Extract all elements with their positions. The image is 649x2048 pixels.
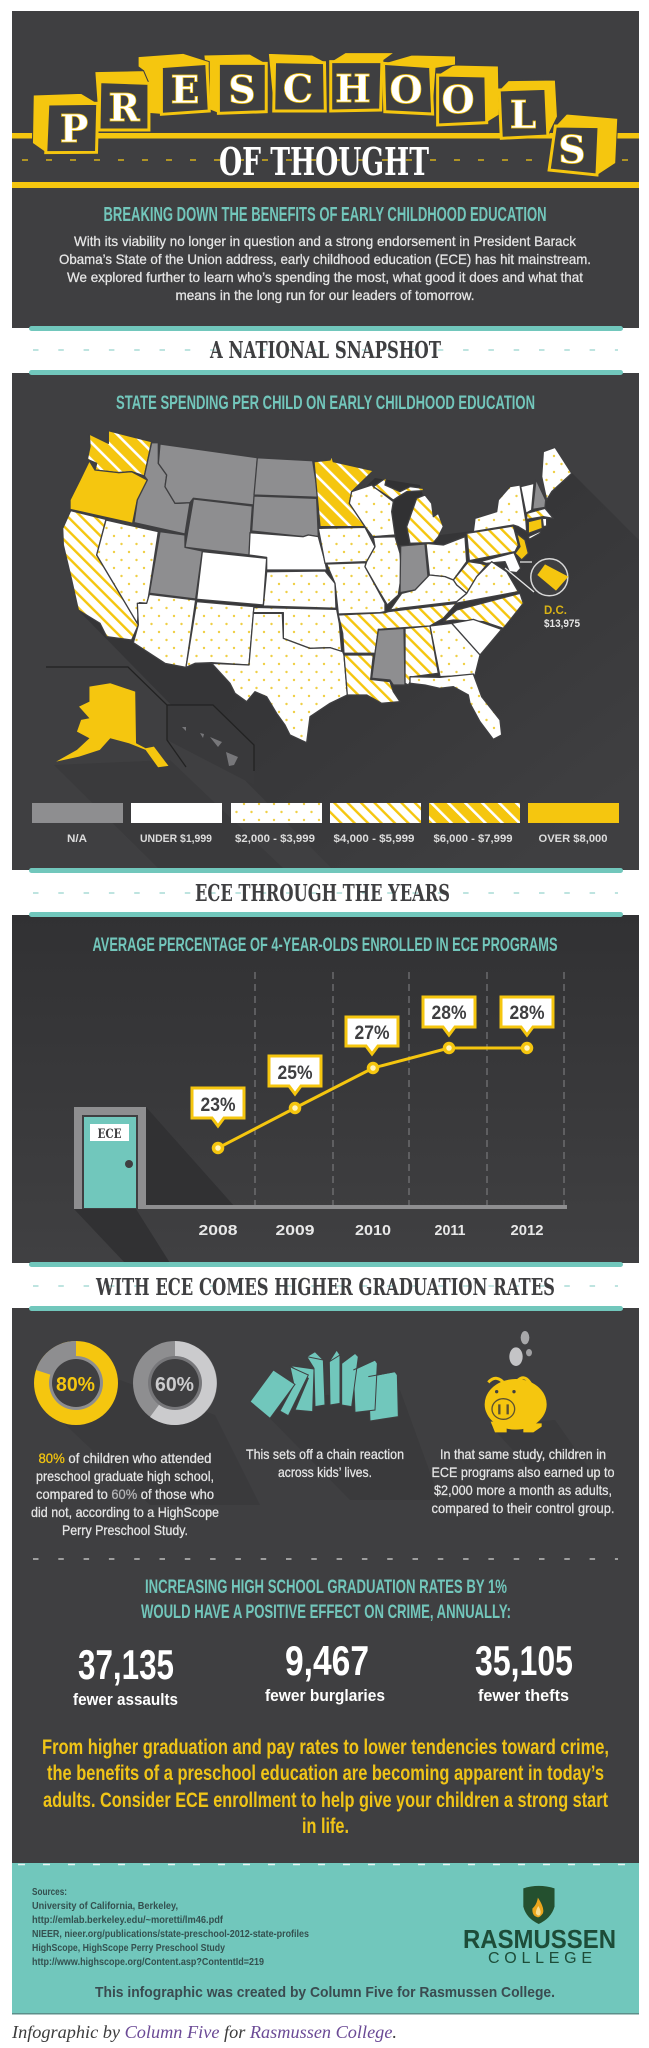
text: earnings stat: compared to their control group. bbox=[432, 1500, 614, 1516]
text: 80% stat: Perry Preschool Study. bbox=[62, 1522, 188, 1538]
credit line: This infographic was created by Column Five for Rasmussen College. bbox=[95, 1984, 555, 2001]
sources: University of California, Berkeley, bbox=[32, 1901, 178, 1912]
sources: http://emlab.berkeley.edu/~moretti/lm46.pdf bbox=[32, 1915, 224, 1926]
icon: door bbox=[74, 1107, 146, 1209]
icon: door: ECE bbox=[98, 1127, 122, 1142]
callout: D.C.: D.C. bbox=[544, 603, 567, 617]
icon shadows bbox=[50, 1380, 590, 1505]
callout: D.C. bbox=[505, 559, 580, 630]
stat: thefts: 35,105 bbox=[475, 1637, 573, 1684]
caption: Infographic by Column Five for Rasmussen College. bbox=[11, 2022, 397, 2042]
panel: header bbox=[12, 11, 639, 328]
intro text bbox=[59, 233, 591, 303]
donut: 60%: 60% bbox=[155, 1374, 194, 1396]
year labels: 2011 bbox=[434, 1223, 466, 1239]
data callouts: 25% bbox=[278, 1063, 313, 1084]
title blocks: PRESCHOOLS: O bbox=[389, 67, 423, 112]
panel: footer bbox=[12, 1863, 639, 2014]
section heading: a national snapshot: A NATIONAL SNAPSHOT bbox=[209, 337, 441, 364]
sources: HighScope, HighScope Perry Preschool Study bbox=[32, 1943, 225, 1954]
callout: D.C.: $13,975 bbox=[544, 618, 580, 630]
legend: N/A bbox=[67, 833, 87, 845]
text: chain reaction: This sets off a chain reaction bbox=[246, 1446, 404, 1462]
logo: Rasmussen College: RASMUSSEN bbox=[463, 1924, 616, 1954]
title blocks: PRESCHOOLS: R bbox=[108, 85, 140, 130]
data callouts bbox=[192, 997, 553, 1126]
data callouts: 23% bbox=[200, 1095, 236, 1116]
panel: graduation rates bbox=[12, 1306, 639, 1863]
section heading: a national snapshot bbox=[29, 326, 623, 364]
year labels bbox=[198, 1223, 544, 1239]
panel: enrollment chart bbox=[12, 912, 639, 1263]
panel: state spending map bbox=[12, 370, 639, 870]
icon: dominoes bbox=[250, 1350, 398, 1421]
title blocks: PRESCHOOLS: P bbox=[60, 106, 88, 151]
title blocks: PRESCHOOLS: S bbox=[228, 67, 256, 112]
text: earnings stat bbox=[432, 1446, 615, 1516]
stat: assaults: fewer assaults bbox=[73, 1690, 178, 1709]
stat: thefts bbox=[475, 1637, 573, 1705]
title blocks: PRESCHOOLS: C bbox=[283, 66, 313, 111]
sources bbox=[32, 1887, 309, 1968]
US map bbox=[63, 431, 572, 743]
title blocks: PRESCHOOLS: O bbox=[441, 77, 475, 122]
intro text: With its viability no longer in question and a strong endorsement in President Barack bbox=[74, 233, 577, 249]
text: 80% stat bbox=[31, 1450, 219, 1538]
text: 80% stat: compared to 60% of those who bbox=[36, 1486, 214, 1502]
legend: $6,000 - $7,999 bbox=[434, 833, 512, 845]
sources: http://www.highscope.org/Content.asp?ContentId=219 bbox=[32, 1957, 264, 1968]
sources: Sources: bbox=[32, 1887, 67, 1898]
text: earnings stat: $2,000 more a month as adults, bbox=[434, 1482, 612, 1498]
section heading: higher graduation rates bbox=[29, 1262, 623, 1301]
year labels: 2008 bbox=[198, 1223, 238, 1239]
hawaii inset bbox=[167, 705, 254, 785]
text: chain reaction bbox=[246, 1446, 404, 1480]
title blocks: PRESCHOOLS: S bbox=[558, 127, 586, 172]
text: earnings stat: ECE programs also earned up to bbox=[432, 1464, 615, 1480]
hawaii bbox=[182, 727, 238, 766]
conclusion text: in life. bbox=[302, 1815, 349, 1838]
title blocks: PRESCHOOLS: E bbox=[171, 67, 199, 112]
legend: $4,000 - $5,999 bbox=[334, 833, 414, 845]
alaska shadow bbox=[54, 760, 285, 870]
crime heading bbox=[141, 1576, 511, 1623]
door shadow bbox=[74, 1107, 235, 1263]
title blocks: PRESCHOOLS: H bbox=[335, 66, 371, 111]
alaska bbox=[56, 683, 168, 767]
text: earnings stat: In that same study, children in bbox=[440, 1446, 606, 1462]
section heading: ECE through the years bbox=[29, 868, 623, 907]
stat: burglaries: fewer burglaries bbox=[265, 1686, 385, 1705]
data callouts: 27% bbox=[354, 1023, 390, 1044]
intro text: We explored further to learn who’s spending the most, what good it does and what that bbox=[67, 269, 583, 285]
text: chain reaction: across kids’ lives. bbox=[278, 1464, 372, 1480]
data callouts: 28% bbox=[510, 1003, 545, 1024]
logo: Rasmussen College bbox=[463, 1886, 616, 1967]
line chart bbox=[214, 1044, 532, 1152]
title blocks: PRESCHOOLS bbox=[32, 53, 618, 175]
intro text: means in the long run for our leaders of tomorrow. bbox=[176, 287, 474, 303]
donut: 80% bbox=[34, 1341, 118, 1425]
sources: NIEER, nieer.org/publications/state-preschool-2012-state-profiles bbox=[32, 1929, 309, 1940]
section heading: ECE through the years: ECE THROUGH THE YEARS bbox=[195, 880, 450, 907]
conclusion text bbox=[42, 1736, 609, 1838]
legend bbox=[32, 803, 619, 845]
legend: OVER $8,000 bbox=[538, 833, 608, 845]
donut: 80%: 80% bbox=[56, 1374, 95, 1396]
stat: burglaries: 9,467 bbox=[285, 1637, 369, 1684]
map shadow bbox=[78, 473, 639, 870]
great lakes bbox=[352, 478, 437, 545]
logo: Rasmussen College: COLLEGE bbox=[488, 1950, 592, 1967]
legend: UNDER $1,999 bbox=[140, 833, 212, 845]
stat: assaults: 37,135 bbox=[78, 1641, 174, 1688]
stat: assaults bbox=[73, 1641, 178, 1709]
title blocks: PRESCHOOLS: L bbox=[510, 92, 536, 137]
legend: $2,000 - $3,999 bbox=[235, 833, 315, 845]
year labels: 2009 bbox=[276, 1223, 314, 1239]
donut: 60% bbox=[133, 1341, 217, 1425]
baseline bbox=[141, 1205, 567, 1209]
inset lines bbox=[46, 667, 254, 771]
year labels: 2010 bbox=[355, 1223, 391, 1239]
year labels: 2012 bbox=[510, 1223, 544, 1239]
icon: piggy bank and coins bbox=[485, 1331, 547, 1432]
data callouts: 28% bbox=[432, 1003, 467, 1024]
text: 80% stat: preschool graduate high school, bbox=[36, 1468, 214, 1484]
title: of thought: OF THOUGHT bbox=[219, 139, 429, 184]
text: 80% stat: did not, according to a HighScope bbox=[31, 1504, 219, 1520]
stat: burglaries bbox=[265, 1637, 385, 1705]
text: 80% stat: 80% of children who attended bbox=[38, 1450, 212, 1466]
intro text: Obama’s State of the Union address, early childhood education (ECE) has hit mainstream. bbox=[59, 251, 591, 267]
stat: thefts: fewer thefts bbox=[478, 1686, 569, 1705]
year gridlines bbox=[255, 972, 564, 1207]
